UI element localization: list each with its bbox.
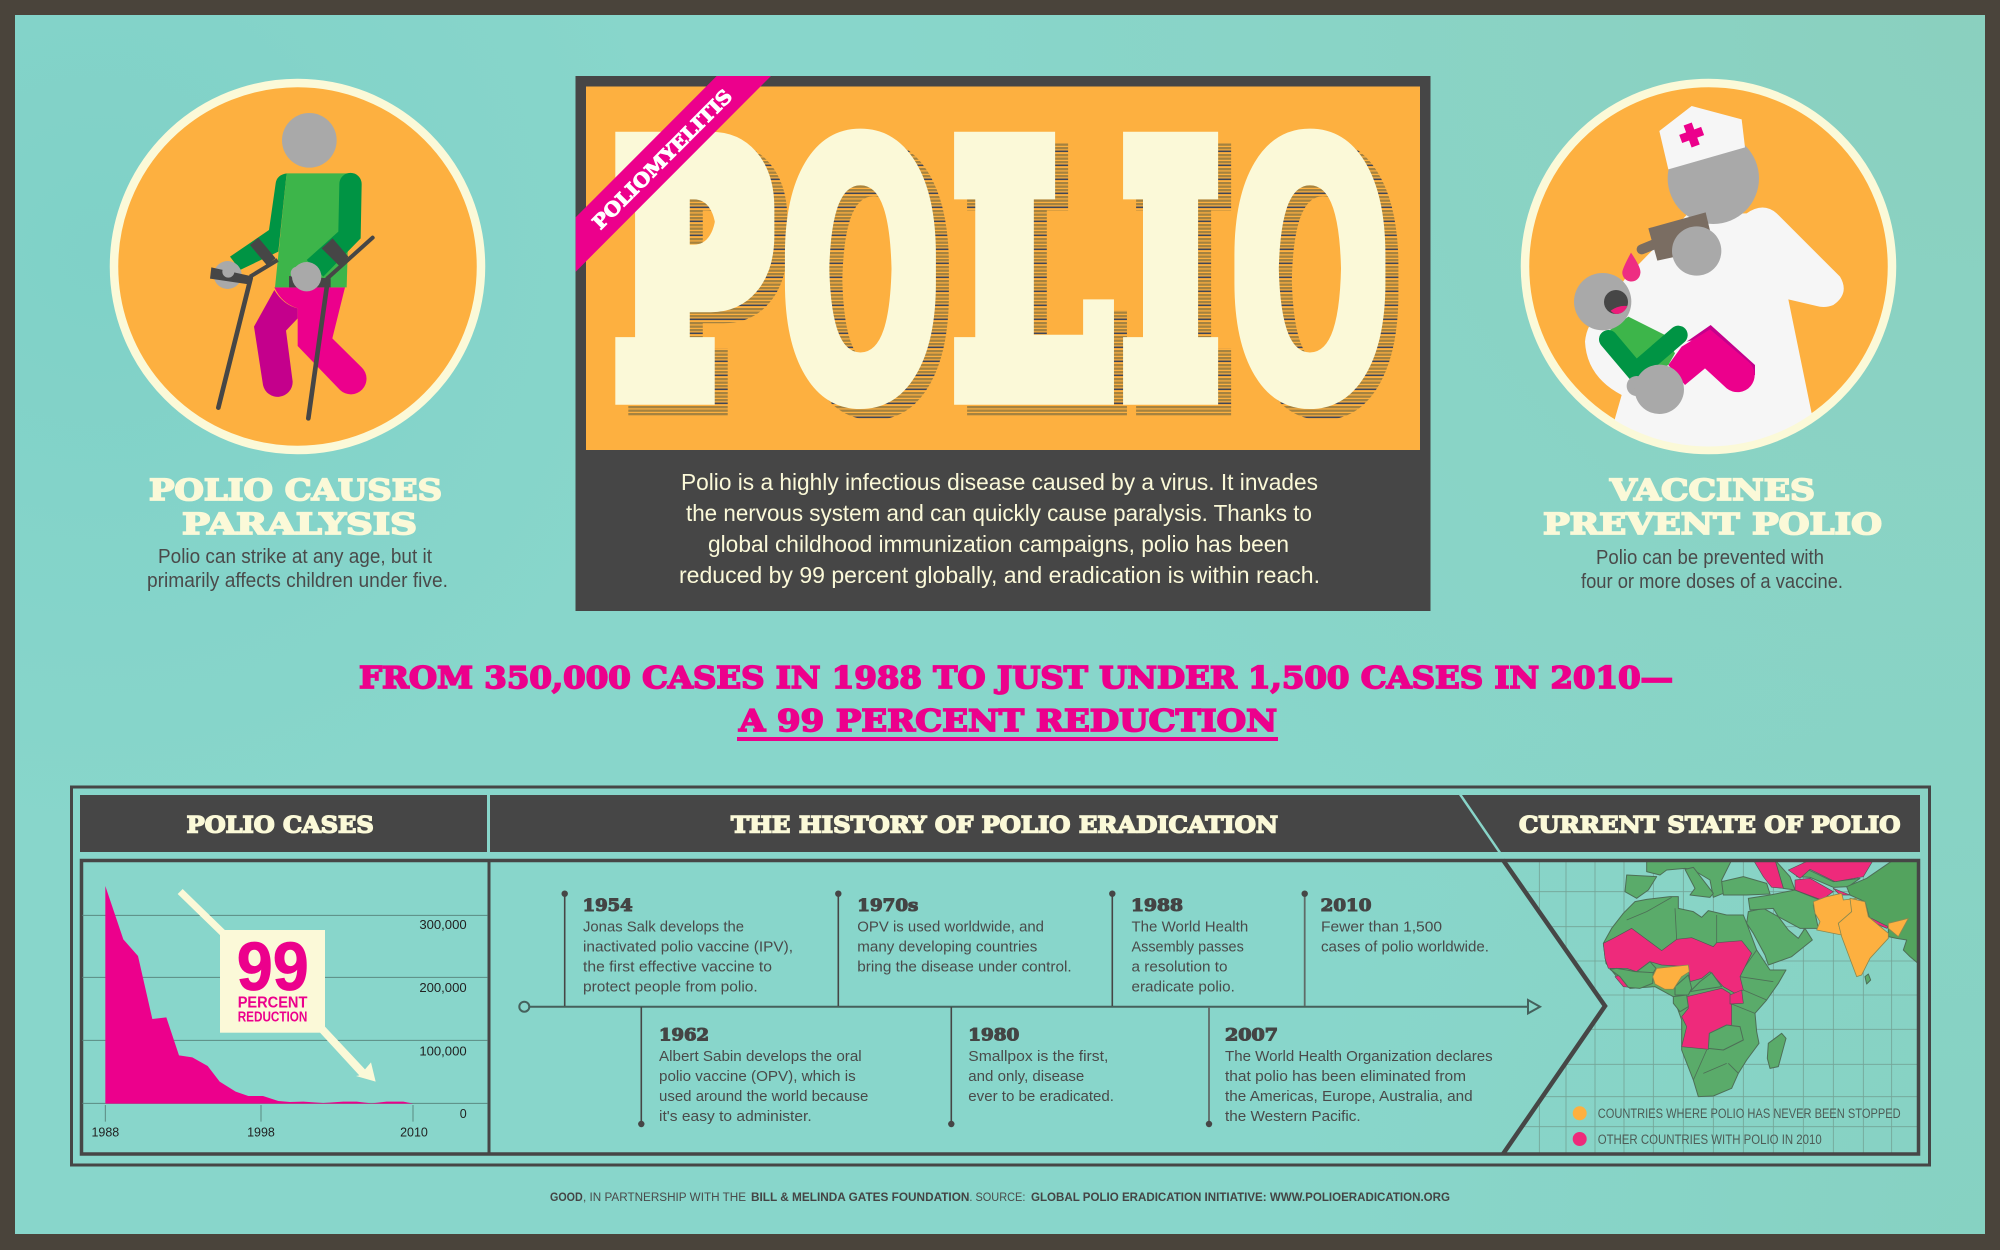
heading: polio causes paralysis (149, 473, 442, 541)
Congo and Angola (1682, 988, 1732, 1049)
text: polio description (679, 469, 1320, 588)
heading: vaccines prevent polio: VACCINES (1609, 473, 1815, 507)
event 1954: inactivated polio vaccine (IPV), (583, 939, 793, 956)
text: vaccine description: four or more doses of a vaccine. (1581, 571, 1843, 593)
chart: polio cases 1988-2010: 200,000 (419, 981, 467, 995)
title: POLIO: O (780, 84, 941, 462)
timeline: history of polio eradication (519, 890, 1540, 1127)
event 1988: a resolution to (1132, 959, 1228, 976)
event 1980: 1980 (968, 1025, 1019, 1044)
chart: polio cases 1988-2010: 2010 (400, 1126, 428, 1140)
chart: polio cases 1988-2010: 100,000 (419, 1044, 467, 1058)
event 1988: eradicate polio. (1132, 979, 1235, 996)
callout: 99 percent reduction: 99 (237, 928, 309, 1005)
footer credits: BILL & MELINDA GATES FOUNDATION (751, 1192, 969, 1204)
title: POLIO (613, 84, 1391, 462)
callout: 99 percent reduction (178, 889, 376, 1082)
text: polio description: Polio is a highly infectious disease caused by a virus. It invades (681, 469, 1318, 495)
header: current state of polio (1462, 795, 1920, 852)
title: POLIO: O (1229, 84, 1391, 462)
timeline axis (519, 1000, 1540, 1013)
header: polio cases (80, 795, 487, 852)
event 1962: 1962 (659, 1025, 709, 1044)
header: polio cases: POLIO CASES (187, 812, 374, 838)
headline: case reduction: FROM 350,000 CASES IN 1988 TO JUST UNDER 1,500 CASES IN 2010— (359, 661, 1673, 696)
title: POLIO: P (613, 94, 772, 453)
header: current state of polio: CURRENT STATE OF POLIO (1519, 812, 1900, 838)
header: history of polio eradication: THE HISTORY OF POLIO ERADICATION (731, 812, 1278, 838)
text: vaccine description: Polio can be prevented with (1596, 547, 1824, 569)
heading: vaccines prevent polio (1543, 473, 1882, 541)
footer credits (550, 1192, 1450, 1204)
Sahel band (1603, 928, 1752, 993)
event 1954: 1954 (583, 896, 633, 915)
chart: polio cases 1988-2010: 1988 (91, 1126, 119, 1140)
event 1954 (562, 890, 793, 1006)
map legend: COUNTRIES WHERE POLIO HAS NEVER BEEN STOPPED (1598, 1106, 1901, 1121)
event 2010: 2010 (1321, 896, 1371, 915)
text: polio description: reduced by 99 percent globally, and eradication is within reach. (679, 562, 1320, 588)
title: POLIO: I (1121, 93, 1220, 453)
headline: case reduction (359, 661, 1673, 741)
heading: vaccines prevent polio: PREVENT POLIO (1543, 507, 1882, 541)
Arabia (1747, 908, 1812, 965)
event 1962: used around the world because (659, 1088, 868, 1105)
panel: polio title (576, 76, 1430, 611)
event 2010: cases of polio worldwide. (1321, 939, 1489, 956)
event 1962: Albert Sabin develops the oral (659, 1048, 862, 1065)
event 1970s: 1970s (857, 896, 918, 915)
footer credits: . SOURCE: (969, 1192, 1025, 1204)
event 1980 (948, 1007, 1114, 1127)
event 1980: Smallpox is the first, (968, 1048, 1108, 1065)
Africa (1603, 897, 1786, 1097)
map legend (1573, 1106, 1901, 1147)
Europe (1647, 860, 1732, 897)
callout: 99 percent reduction: REDUCTION (238, 1010, 307, 1026)
event 1970s: OPV is used worldwide, and (857, 919, 1044, 936)
event 2010 (1302, 890, 1489, 1006)
text: vaccine description (1581, 547, 1843, 593)
footer credits: GLOBAL POLIO ERADICATION INITIATIVE: WWW.POLIOERADICATION.ORG (1031, 1192, 1450, 1204)
event 2007: the Americas, Europe, Australia, and (1225, 1088, 1473, 1105)
event 1954: Jonas Salk develops the (583, 919, 744, 936)
icon: nurse vaccinating a baby (1525, 83, 1892, 460)
event 2007: the Western Pacific. (1225, 1108, 1361, 1125)
map: polio in Africa and South Asia (1503, 860, 1920, 1155)
Turkey (1722, 877, 1770, 895)
heading: polio causes paralysis: POLIO CAUSES (149, 473, 442, 507)
East Asia (1847, 860, 1920, 965)
Iberia (1625, 875, 1657, 898)
event 1954: the first effective vaccine to (583, 959, 772, 976)
event 1962: it's easy to administer. (659, 1108, 812, 1125)
event 1962: polio vaccine (OPV), which is (659, 1068, 856, 1085)
chart: polio cases 1988-2010 (82, 886, 487, 1140)
event 1970s: many developing countries (857, 939, 1037, 956)
headline: case reduction: A 99 PERCENT REDUCTION (738, 704, 1277, 739)
map legend: OTHER COUNTRIES WITH POLIO IN 2010 (1598, 1132, 1822, 1147)
event 2007 (1206, 1007, 1493, 1127)
event 1970s: bring the disease under control. (857, 959, 1072, 976)
Asia (1753, 860, 1783, 888)
header: history of polio eradication (490, 795, 1498, 852)
chart: polio cases 1988-2010: 0 (460, 1107, 467, 1121)
event 1980: and only, disease (968, 1068, 1084, 1085)
footer credits: GOOD (550, 1192, 583, 1204)
event 2007: The World Health Organization declares (1225, 1048, 1493, 1065)
ribbon: poliomyelitis: POLIOMYELITIS (588, 85, 737, 234)
event 1962 (638, 1007, 868, 1127)
footer credits: , IN PARTNERSHIP WITH THE (583, 1192, 746, 1204)
title: POLIO: L (951, 92, 1111, 453)
panel: chart and timeline frame (82, 860, 1918, 1154)
panel: vaccines prevent polio (1525, 83, 1892, 593)
heading: polio causes paralysis: PARALYSIS (182, 507, 417, 541)
panel: polio causes paralysis (114, 83, 481, 592)
chart: polio cases 1988-2010: 1998 (247, 1126, 275, 1140)
event 2010: Fewer than 1,500 (1321, 919, 1442, 936)
event 1988: The World Health (1132, 919, 1248, 936)
event 1970s (835, 890, 1072, 1006)
icon: paralysed figure on crutches (114, 83, 481, 450)
title shadow (628, 144, 1398, 418)
chart: polio cases 1988-2010: 300,000 (419, 918, 467, 932)
event 1980: ever to be eradicated. (968, 1088, 1114, 1105)
event 1988: 1988 (1131, 896, 1183, 915)
panel: data section frame (72, 787, 1930, 1165)
event 2007: 2007 (1225, 1025, 1278, 1044)
callout: 99 percent reduction: PERCENT (238, 995, 308, 1012)
text: paralysis description: Polio can strike at any age, but it (158, 546, 432, 568)
event 1954: protect people from polio. (583, 979, 758, 996)
event 1988: Assembly passes (1132, 939, 1244, 956)
event 1988 (1109, 890, 1248, 1006)
text: polio description: the nervous system and can quickly cause paralysis. Thanks to (686, 500, 1312, 526)
text: paralysis description: primarily affects children under five. (147, 570, 448, 592)
event 2007: that polio has been eliminated from (1225, 1068, 1466, 1085)
ribbon: poliomyelitis (576, 76, 771, 272)
text: polio description: global childhood immunization campaigns, polio has been (708, 531, 1289, 557)
text: paralysis description (147, 546, 448, 592)
